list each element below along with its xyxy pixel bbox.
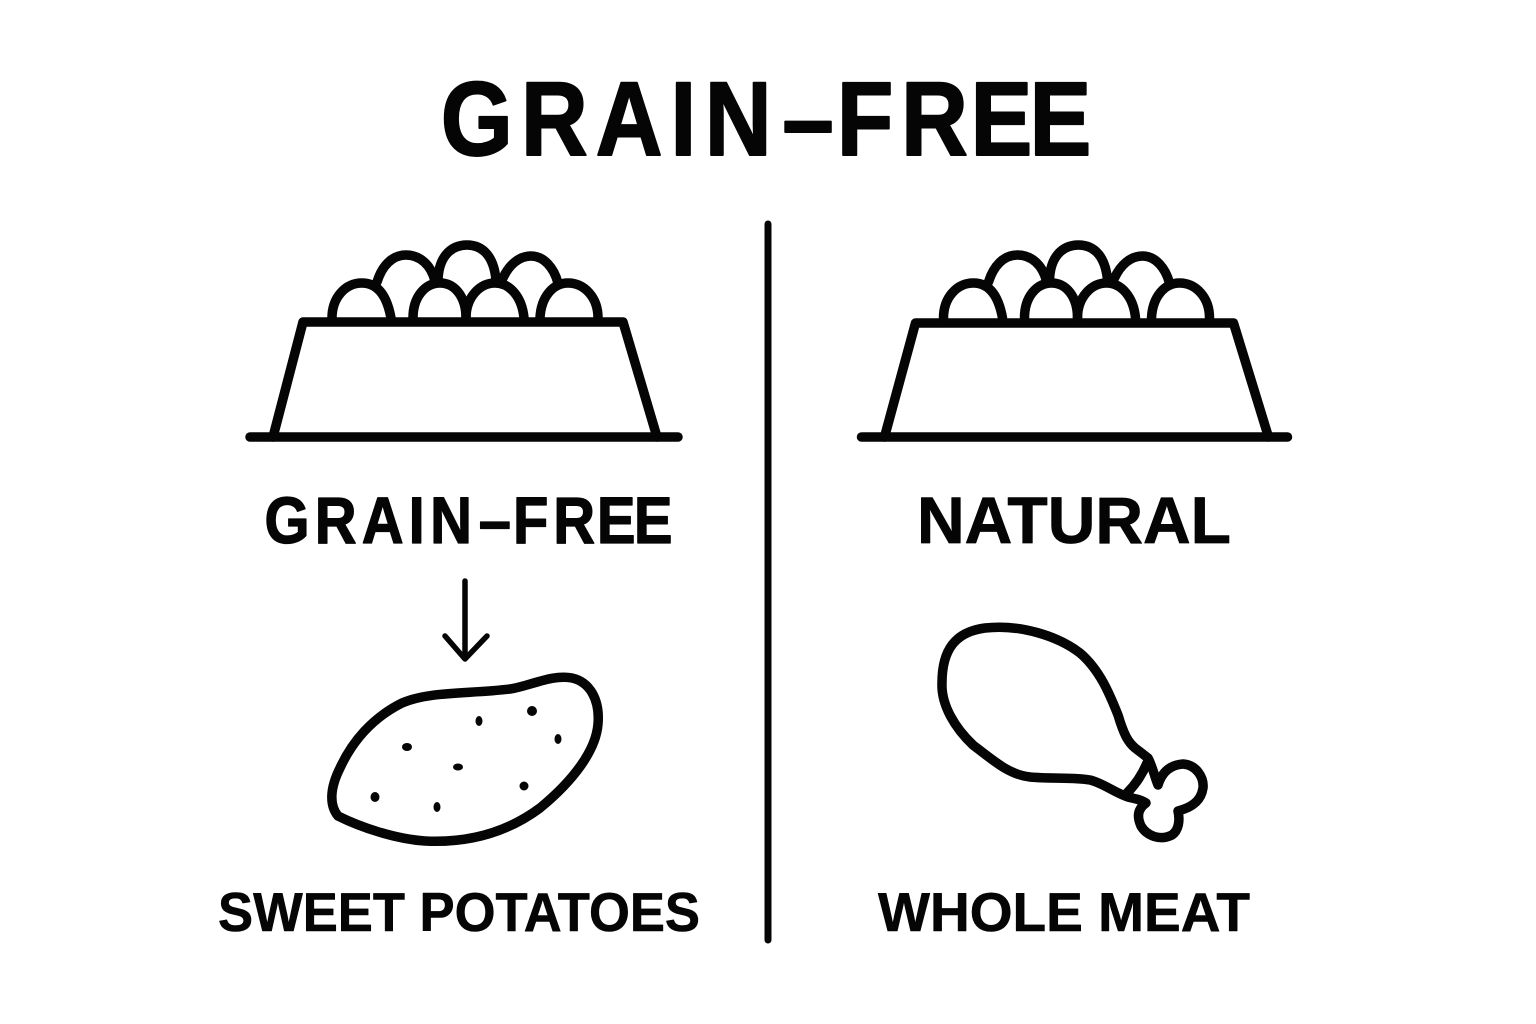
label: sweet potatoes: SWEET POTATOES xyxy=(218,881,700,943)
panel: natural xyxy=(862,245,1288,943)
label: whole meat: WHOLE MEAT xyxy=(878,881,1250,943)
arrow: down to sweet potato xyxy=(445,581,487,659)
icon: chicken drumstick xyxy=(942,627,1203,838)
title: GRAIN–FREE xyxy=(441,59,1091,177)
label: grain-free: GRAIN–FREE xyxy=(265,485,673,558)
icon: natural food bowl xyxy=(862,245,1288,437)
label: natural: NATURAL xyxy=(917,483,1231,557)
icon: sweet potato xyxy=(332,677,598,841)
panel: grain-free xyxy=(218,245,700,943)
divider line xyxy=(764,224,772,940)
icon: grain-free food bowl xyxy=(250,245,678,437)
